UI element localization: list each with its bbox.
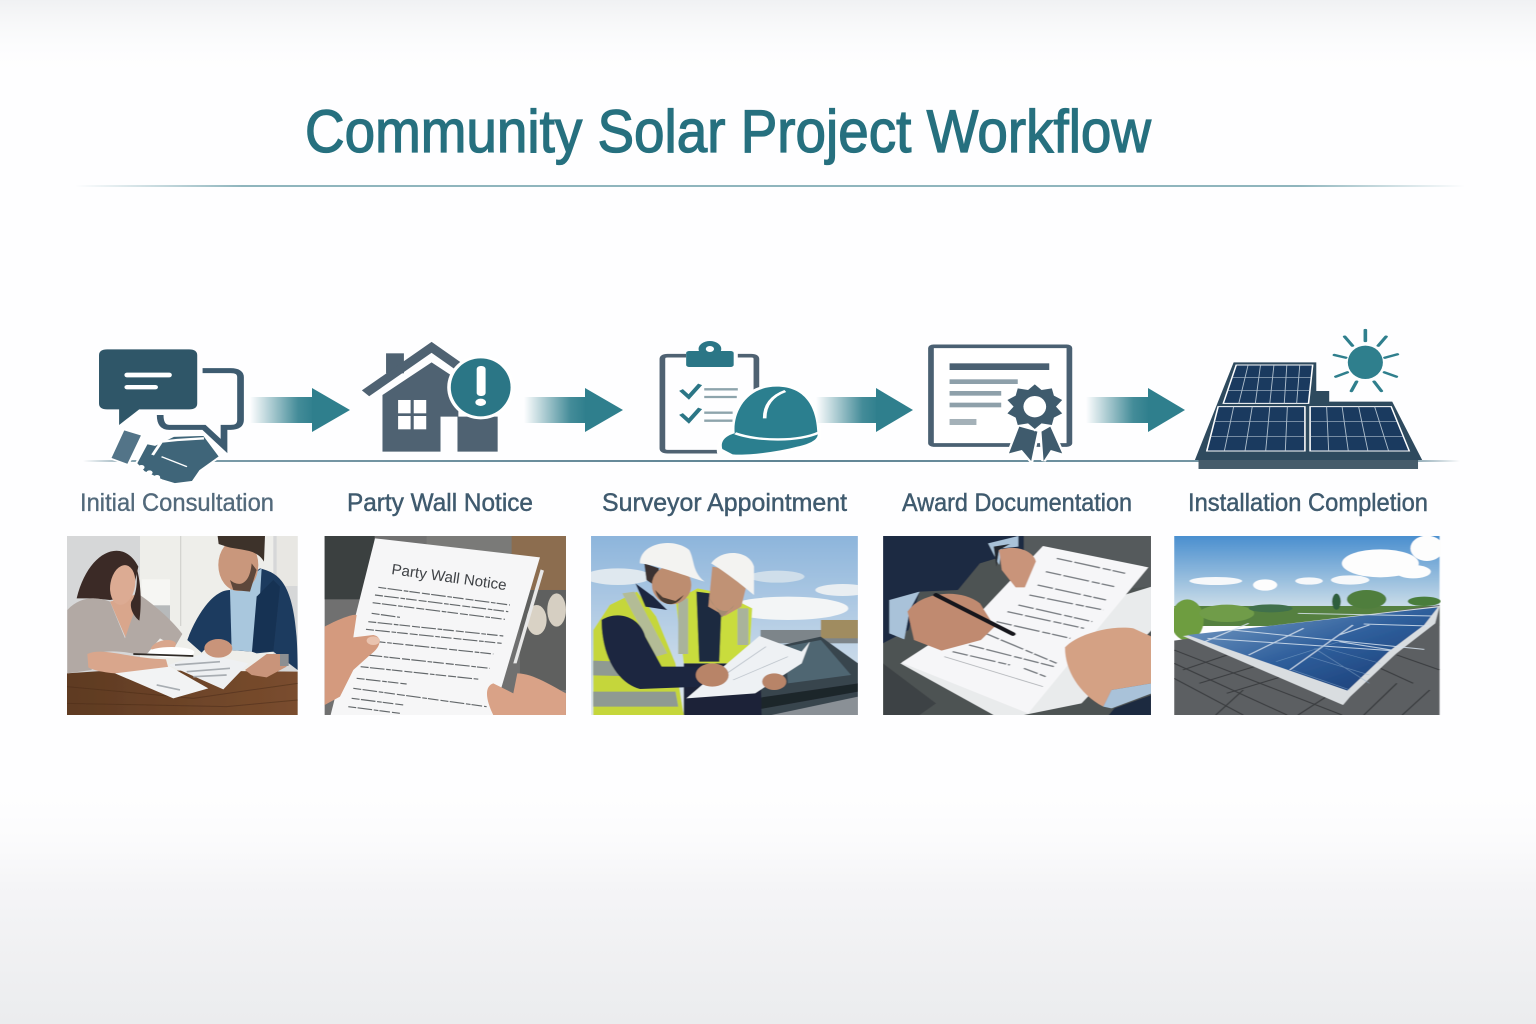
photo: hands holding party wall notice	[325, 536, 566, 715]
label: Surveyor Appointment: Surveyor Appointment	[602, 489, 847, 517]
label: Initial Consultation: Initial Consultation	[80, 489, 274, 517]
photo: surveyors on a roof	[585, 536, 870, 715]
photo: signing award document	[883, 536, 1152, 715]
arrow 4	[1086, 388, 1185, 432]
arrow 3	[816, 388, 913, 432]
photo: consultation at a table	[67, 536, 298, 715]
icon: award certificate	[931, 346, 1069, 461]
document heading in photo: Party Wall Notice	[390, 561, 508, 594]
icon: consultation speech bubbles and handshake	[99, 349, 241, 484]
photo: rooftop solar installation	[1171, 536, 1443, 715]
title: Community Solar Project Workflow	[305, 98, 1152, 165]
label: Party Wall Notice: Party Wall Notice	[347, 489, 533, 517]
icon: clipboard and hard hat	[662, 341, 822, 456]
arrow 1	[250, 388, 350, 432]
icon: house with alert	[366, 347, 514, 452]
label: Award Documentation: Award Documentation	[902, 489, 1132, 517]
icon: solar panels with sun	[1195, 330, 1422, 469]
sun	[1334, 330, 1397, 391]
arrow 2	[524, 388, 623, 432]
label: Installation Completion: Installation Completion	[1188, 489, 1428, 517]
